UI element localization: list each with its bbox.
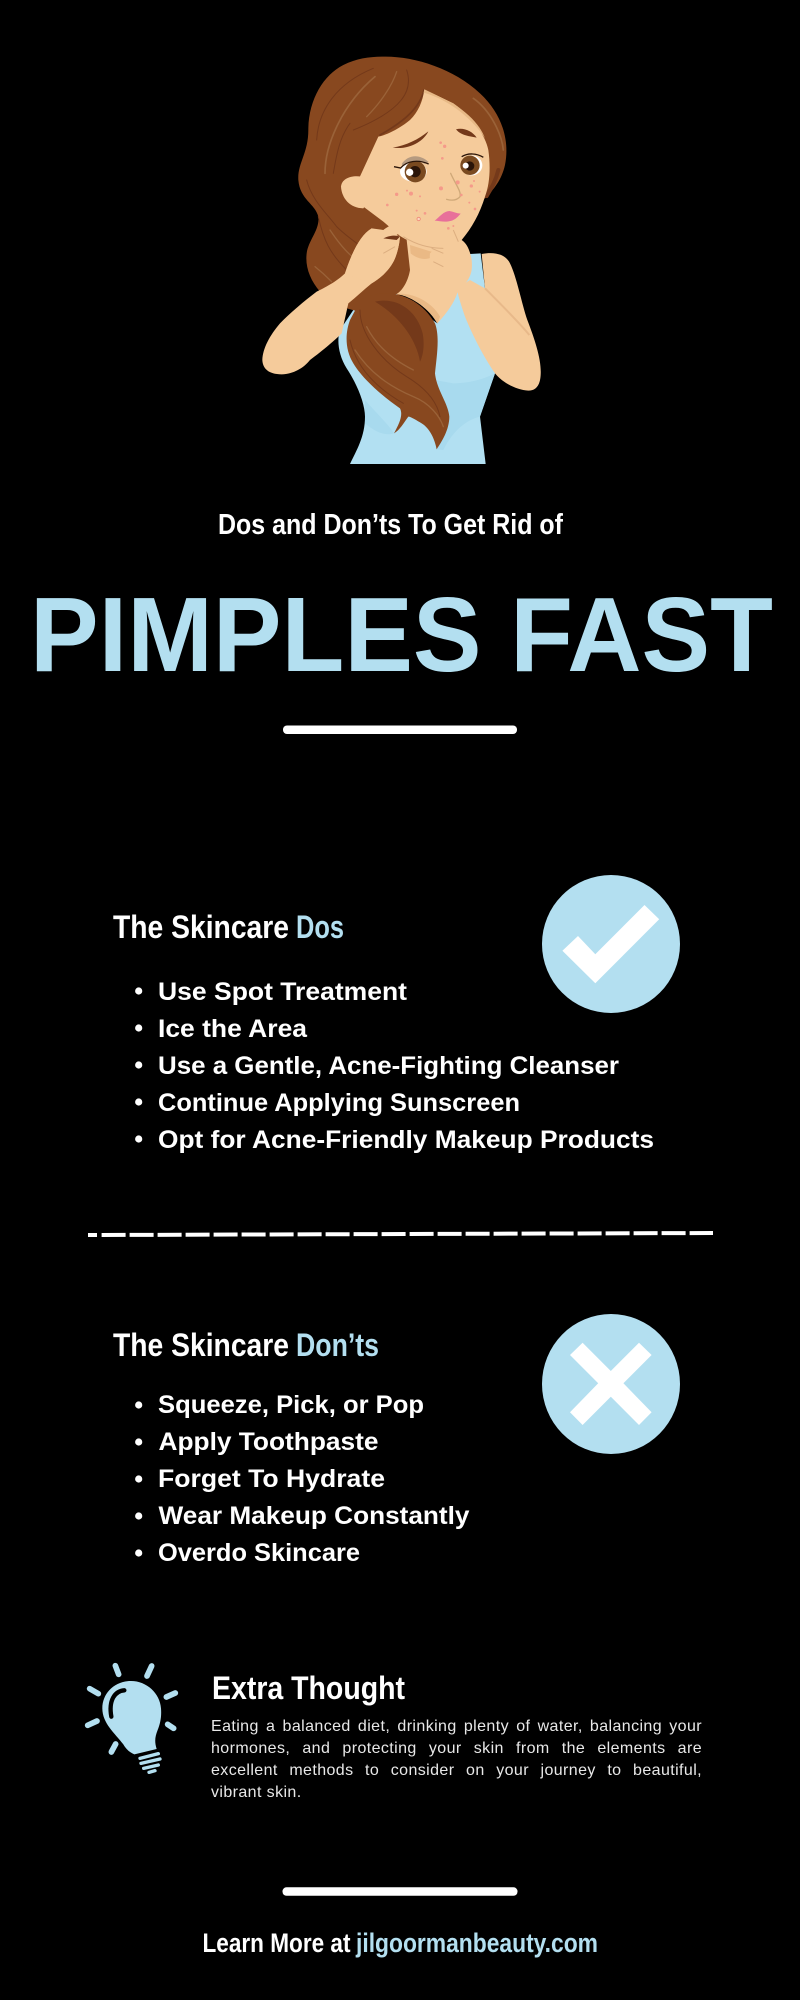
eyebrows <box>393 129 477 148</box>
ponytail <box>347 293 449 449</box>
list: don'ts: Wear Makeup Constantly <box>158 1502 470 1530</box>
bottom divider bar <box>282 1887 518 1896</box>
top divider bar <box>283 726 517 734</box>
neck shadow <box>397 245 440 323</box>
panel: the skincare dos <box>113 875 680 1154</box>
heading: dos: The Skincare <box>113 909 289 945</box>
panel: the skincare don'ts <box>113 1314 680 1567</box>
footer call to action: Learn More at <box>202 1928 351 1958</box>
list: don'ts <box>135 1391 470 1567</box>
list: dos: Opt for Acne-Friendly Makeup Products <box>158 1126 654 1154</box>
text block: extra thought body: vibrant skin. <box>211 1784 302 1801</box>
list: dos: Continue Applying Sunscreen <box>158 1089 520 1117</box>
icon: light bulb <box>88 1666 175 1772</box>
lips <box>435 211 461 222</box>
dashed divider <box>88 1233 713 1235</box>
list: dos: Ice the Area <box>158 1015 308 1043</box>
list: dos: Use a Gentle, Acne-Fighting Cleanser <box>158 1052 619 1080</box>
neck and chest <box>397 240 467 323</box>
right hand <box>419 217 472 290</box>
footer call to action <box>202 1928 598 1958</box>
list: don'ts: Squeeze, Pick, or Pop <box>158 1391 424 1419</box>
nose <box>447 173 460 200</box>
hair strands <box>307 68 503 282</box>
icon: cross in circle <box>542 1314 680 1454</box>
heading: don'ts: The Skincare <box>113 1327 289 1363</box>
heading: extra thought: Extra Thought <box>212 1670 405 1706</box>
face <box>358 89 490 250</box>
list: don'ts: Apply Toothpaste <box>158 1428 379 1456</box>
right eye <box>460 154 483 175</box>
ponytail strands <box>350 310 443 427</box>
back hair <box>298 57 506 308</box>
text block: extra thought body <box>211 1718 702 1801</box>
dress shading <box>435 373 495 450</box>
finger outlines <box>383 230 458 267</box>
illustration: girl popping a pimple <box>262 57 541 464</box>
subtitle: Dos and Don’ts To Get Rid of <box>218 509 563 541</box>
footer call to action: jilgoormanbeauty.com <box>355 1928 598 1958</box>
text block: extra thought body: excellent methods to consider on your journey to beautiful, <box>211 1762 702 1779</box>
title: PIMPLES FAST <box>30 576 773 694</box>
heading: don'ts: Don’ts <box>296 1327 379 1363</box>
list: don'ts: Forget To Hydrate <box>158 1465 385 1493</box>
left arm <box>262 228 400 374</box>
text block: extra thought body: Eating a balanced diet, drinking plenty of water, balancing your <box>211 1718 702 1735</box>
ponytail dark lock <box>375 301 424 362</box>
left hand <box>345 216 420 283</box>
dress <box>338 253 495 464</box>
text block: extra thought body: hormones, and protecting your skin from the elements are <box>211 1740 702 1757</box>
heading: dos: Dos <box>296 909 344 945</box>
list: dos <box>135 978 654 1154</box>
icon: check mark in circle <box>542 875 680 1013</box>
pimples <box>386 141 481 230</box>
forehead shadow <box>424 89 485 138</box>
right arm <box>457 253 541 391</box>
left eye <box>394 156 429 182</box>
list: don'ts: Overdo Skincare <box>158 1539 360 1567</box>
squeezed pimple <box>417 217 420 221</box>
ear <box>341 176 372 208</box>
list: dos: Use Spot Treatment <box>158 978 408 1006</box>
